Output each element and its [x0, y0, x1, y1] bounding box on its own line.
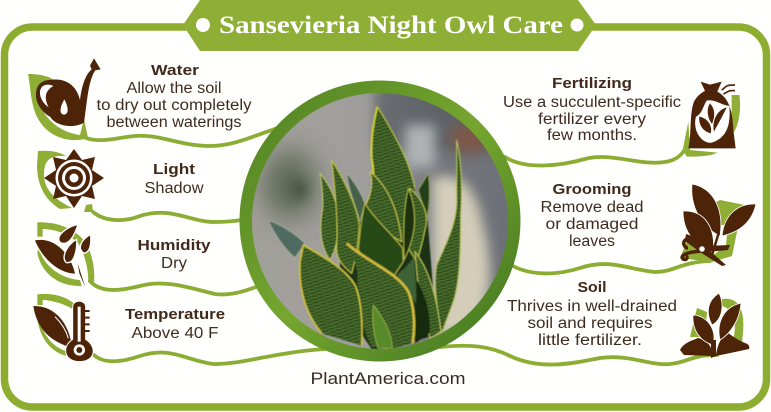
text: fertilizing — [503, 75, 681, 144]
text: fertilizing: few months. — [547, 127, 637, 144]
text: water: Allow the soil — [126, 80, 222, 97]
text: humidity: Dry — [161, 255, 187, 272]
text: humidity — [138, 237, 211, 272]
icon: thermometer — [33, 294, 93, 362]
photo background — [250, 85, 510, 352]
text: light: Shadow — [144, 180, 204, 197]
text: soil: little fertilizer. — [538, 332, 642, 349]
dark plant backing — [340, 208, 437, 352]
text: temperature: Above 40 F — [132, 325, 218, 342]
text: water — [96, 62, 252, 131]
wavy connector lines — [86, 128, 717, 365]
text: fertilizing: fertilizer every — [538, 111, 646, 128]
icon: watering can — [28, 58, 101, 140]
plant photo — [246, 85, 514, 355]
leaves — [268, 107, 462, 352]
leaf behind can — [28, 74, 88, 140]
text: soil — [507, 279, 677, 349]
text: light — [144, 161, 204, 197]
text: grooming — [540, 181, 644, 250]
text: soil: Thrives in well-drained — [507, 298, 677, 315]
photo ring — [246, 87, 514, 355]
text: grooming: leaves — [569, 233, 615, 250]
text: grooming: Grooming — [552, 181, 632, 198]
leaf behind thermometer — [37, 294, 76, 356]
title banner — [183, 0, 596, 51]
icon: humidity — [34, 222, 94, 287]
text: temperature: Temperature — [125, 306, 225, 323]
text: temperature — [125, 306, 225, 342]
leaf behind drops — [37, 222, 94, 286]
text: humidity: Humidity — [138, 237, 211, 254]
icon: grooming shears — [680, 184, 756, 266]
title: Sansevieria Night Owl Care — [219, 12, 563, 39]
icon: soil and plant — [680, 293, 749, 358]
text: fertilizing: Fertilizing — [552, 75, 632, 92]
text: soil: Soil — [578, 279, 606, 296]
text: water: between waterings — [106, 114, 242, 131]
text: soil: soil and requires — [528, 315, 653, 332]
icon: sun — [37, 149, 104, 212]
icon: fertilizer bag — [683, 82, 740, 157]
text: water: Water — [151, 62, 199, 79]
text: light: Light — [153, 161, 195, 178]
website credit: PlantAmerica.com — [310, 369, 466, 388]
text: grooming: or damaged — [546, 216, 638, 233]
text: water: to dry out completely — [96, 97, 252, 114]
text: grooming: Remove dead — [540, 199, 644, 216]
text: fertilizing: Use a succulent-specific — [503, 94, 681, 111]
leaf behind sun — [37, 151, 93, 212]
